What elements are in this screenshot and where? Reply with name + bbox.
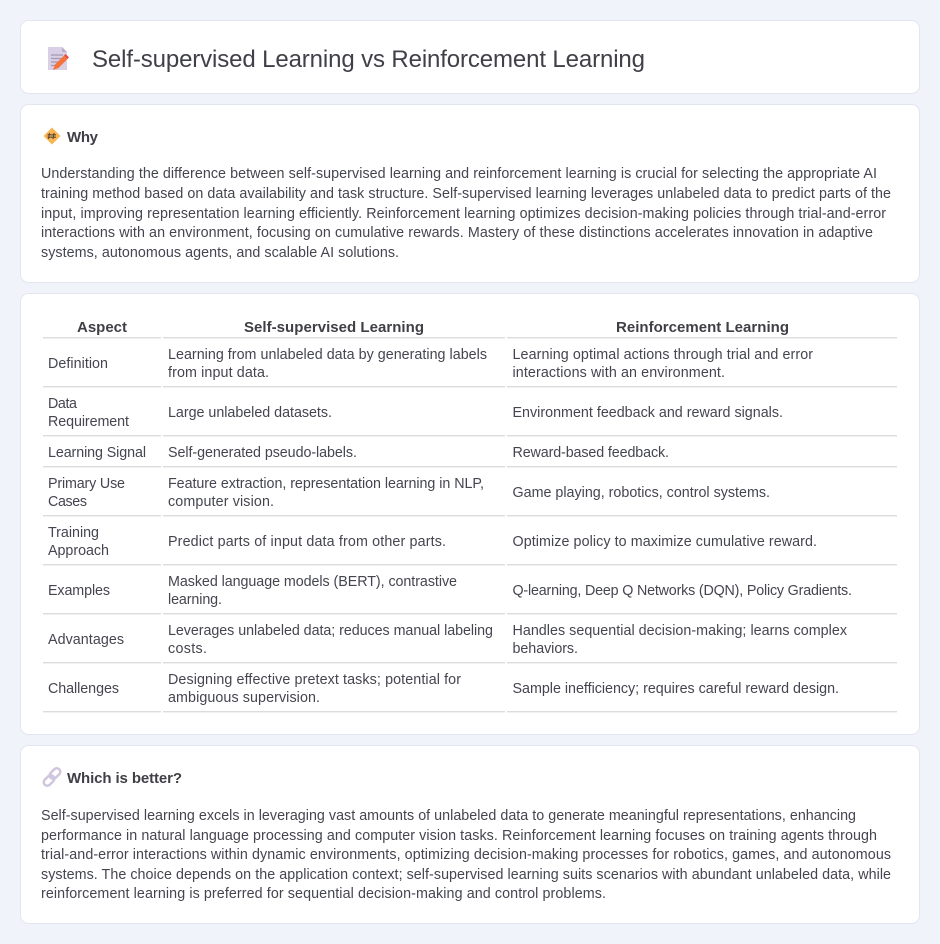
text block: which is better explanation: Self-supervised learning excels in leveraging vast amounts of unlabeled data to generate meaningful representations, enhancing <box>41 808 856 824</box>
text block: which is better explanation: reinforcement learning is preferred for sequential decision-making and control problems. <box>41 886 606 902</box>
row: primary use cases: Cases <box>48 494 87 510</box>
row: training approach: Training <box>48 525 99 541</box>
row: examples: Examples <box>48 583 110 599</box>
row: data requirement: Data <box>48 396 77 412</box>
row: training approach: Optimize policy to maximize cumulative reward. <box>512 534 817 550</box>
text block: why explanation: systems, autonomous agents, and scalable AI solutions. <box>41 245 399 261</box>
row: challenges <box>43 672 897 712</box>
row: data requirement: Requirement <box>48 414 129 430</box>
row: definition: Learning from unlabeled data by generating labels <box>168 347 487 363</box>
title: Self-supervised Learning vs Reinforcement Learning <box>92 46 645 73</box>
text block: why explanation: interactions with an environment, focusing on cumulative rewards. Mastery of these distinctions accelerates innovation in adaptive <box>41 225 873 241</box>
table header: Self-supervised Learning <box>244 319 424 336</box>
row: challenges: Sample inefficiency; requires careful reward design. <box>512 681 839 697</box>
row: advantages: behaviors. <box>512 641 578 657</box>
icon: chain link <box>42 767 62 787</box>
text block: which is better explanation: systems. The choice depends on the application context; self-supervised learning suits scenarios with abundant unlabeled data, while <box>41 867 891 883</box>
row: advantages: costs. <box>168 641 207 657</box>
row: advantages: Leverages unlabeled data; reduces manual labeling <box>168 623 493 639</box>
table header: Reinforcement Learning <box>616 319 789 336</box>
row: data requirement: Large unlabeled datasets. <box>168 405 332 421</box>
row: primary use cases: Game playing, robotics, control systems. <box>512 485 770 501</box>
text block: which is better explanation: performance in natural language processing and computer vision tasks. Reinforcement learning focuses on training agents through <box>41 828 877 844</box>
panel: why <box>20 104 920 282</box>
row: examples: Masked language models (BERT), contrastive <box>168 574 457 590</box>
table header: Aspect <box>77 319 127 336</box>
icon: document with pencil <box>48 47 69 70</box>
panel: comparison table <box>20 294 920 734</box>
row: learning signal: Self-generated pseudo-labels. <box>168 445 357 461</box>
row: data requirement: Environment feedback and reward signals. <box>512 405 783 421</box>
text block: which is better explanation: trial-and-error interactions within dynamic environments, optimizing decision-making processes for robotics, games, and autonomous <box>41 847 891 863</box>
text block: why explanation: Understanding the difference between self-supervised learning and reinforcement learning is crucial for selecting the appropriate AI <box>41 166 877 182</box>
row: primary use cases: Feature extraction, representation learning in NLP, <box>168 476 484 492</box>
table header <box>43 319 897 338</box>
panel: title header <box>20 20 920 94</box>
row: primary use cases: Primary Use <box>48 476 125 492</box>
text block: why explanation <box>41 166 891 261</box>
row: challenges: ambiguous supervision. <box>168 690 320 706</box>
row: definition <box>43 347 897 387</box>
row: definition: interactions with an environment. <box>512 365 725 381</box>
row: advantages: Handles sequential decision-making; learns complex <box>512 623 847 639</box>
row: definition: Learning optimal actions through trial and error <box>512 347 813 363</box>
heading: which is better: Which is better? <box>67 770 182 787</box>
row: primary use cases <box>43 476 897 516</box>
text block: why explanation: training method based on data availability and task structure. Self-supervised learning leverages unlabeled data to predict parts of the <box>41 186 891 202</box>
text block: which is better explanation <box>41 808 891 902</box>
row: advantages: Advantages <box>48 632 124 648</box>
panel: which is better <box>20 746 920 924</box>
row: definition: from input data. <box>168 365 269 381</box>
row: examples: learning. <box>168 592 222 608</box>
row: learning signal: Reward-based feedback. <box>512 445 669 461</box>
row: training approach <box>43 525 897 565</box>
row: challenges: Challenges <box>48 681 119 697</box>
row: examples <box>43 574 897 614</box>
row: learning signal <box>43 445 897 467</box>
heading: why: Why <box>67 129 99 146</box>
row: primary use cases: computer vision. <box>168 494 274 510</box>
row: data requirement <box>43 396 897 436</box>
row: training approach: Predict parts of input data from other parts. <box>168 534 446 550</box>
row: challenges: Designing effective pretext tasks; potential for <box>168 672 461 688</box>
text block: why explanation: input, improving representation learning efficiently. Reinforcement learning optimizes decision-making policies through trial-and-error <box>41 206 886 222</box>
row: learning signal: Learning Signal <box>48 445 146 461</box>
row: definition: Definition <box>48 356 108 372</box>
row: training approach: Approach <box>48 543 109 559</box>
row: advantages <box>43 623 897 663</box>
icon: orange diamond <box>44 128 60 144</box>
row: examples: Q-learning, Deep Q Networks (DQN), Policy Gradients. <box>512 583 852 599</box>
